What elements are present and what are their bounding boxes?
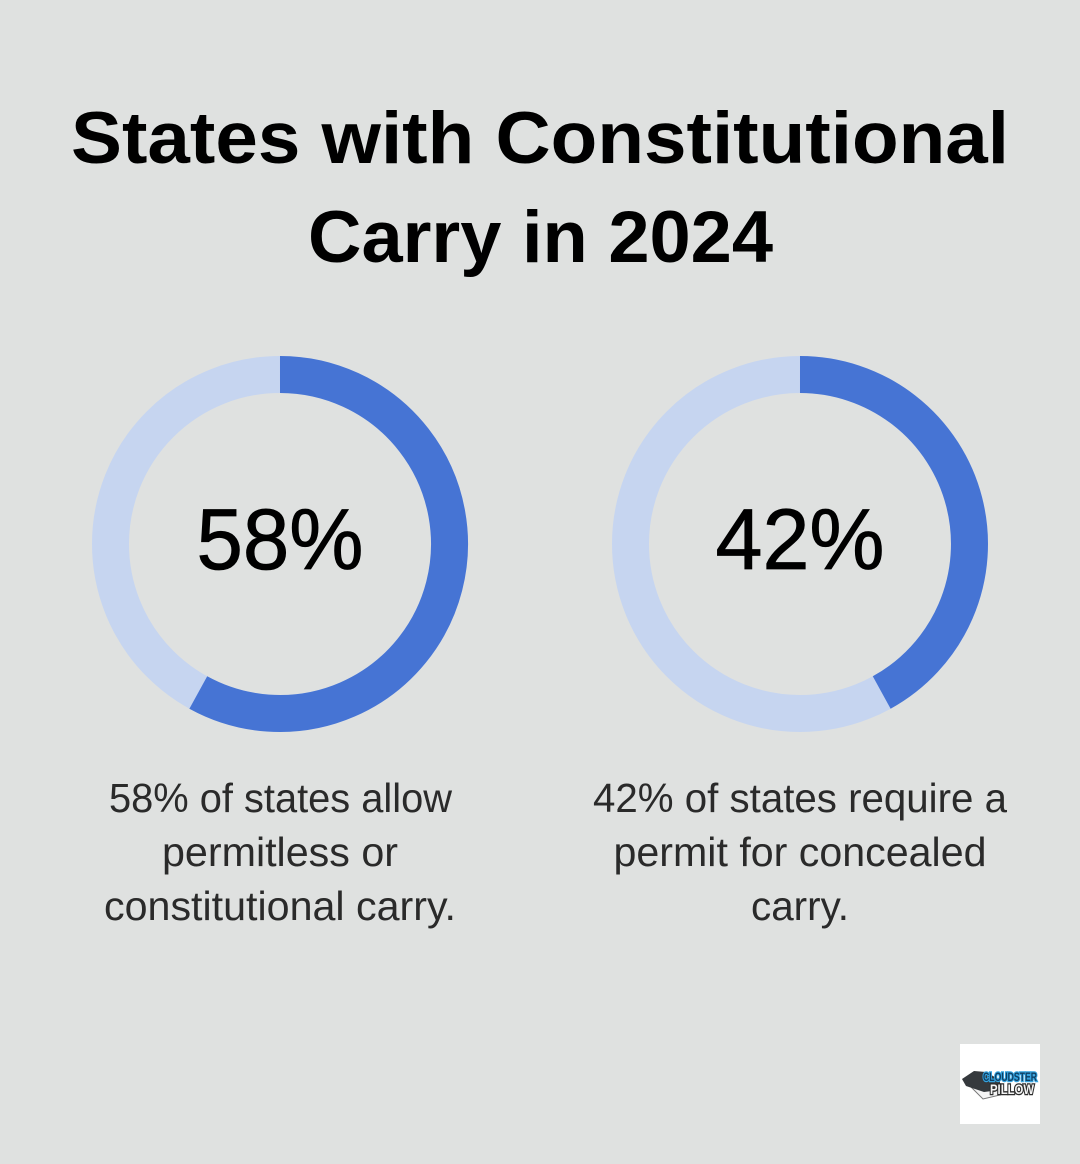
- logo wordmark: CLOUDSTER: [983, 1072, 1038, 1084]
- description: 42 percent: 42% of states require a: [593, 775, 1007, 821]
- title: States with Constitutional: [71, 98, 1009, 179]
- title: Carry in 2024: [308, 197, 773, 278]
- value: 58%: 58%: [196, 492, 364, 588]
- description: 58 percent: 58% of states allow: [109, 775, 452, 821]
- value: 42%: 42%: [716, 492, 884, 588]
- panel: 42 percent: [593, 374, 1007, 929]
- logo wordmark: PILLOW: [990, 1081, 1035, 1097]
- donut chart: 42 percent: [630, 374, 970, 714]
- donut chart: 58 percent: [110, 374, 450, 714]
- description: 58 percent: permitless or: [162, 829, 398, 875]
- description: 42 percent: [593, 775, 1007, 929]
- description: 58 percent: constitutional carry.: [104, 883, 456, 929]
- logo wordmark: [983, 1072, 1038, 1097]
- panel: 58 percent: [104, 374, 456, 929]
- description: 42 percent: permit for concealed: [614, 829, 986, 875]
- title: [71, 98, 1009, 278]
- icon: pillow: [962, 1071, 1000, 1099]
- description: 58 percent: [104, 775, 456, 929]
- description: 42 percent: carry.: [751, 883, 849, 929]
- logo: Cloudster Pillow: [960, 1044, 1040, 1124]
